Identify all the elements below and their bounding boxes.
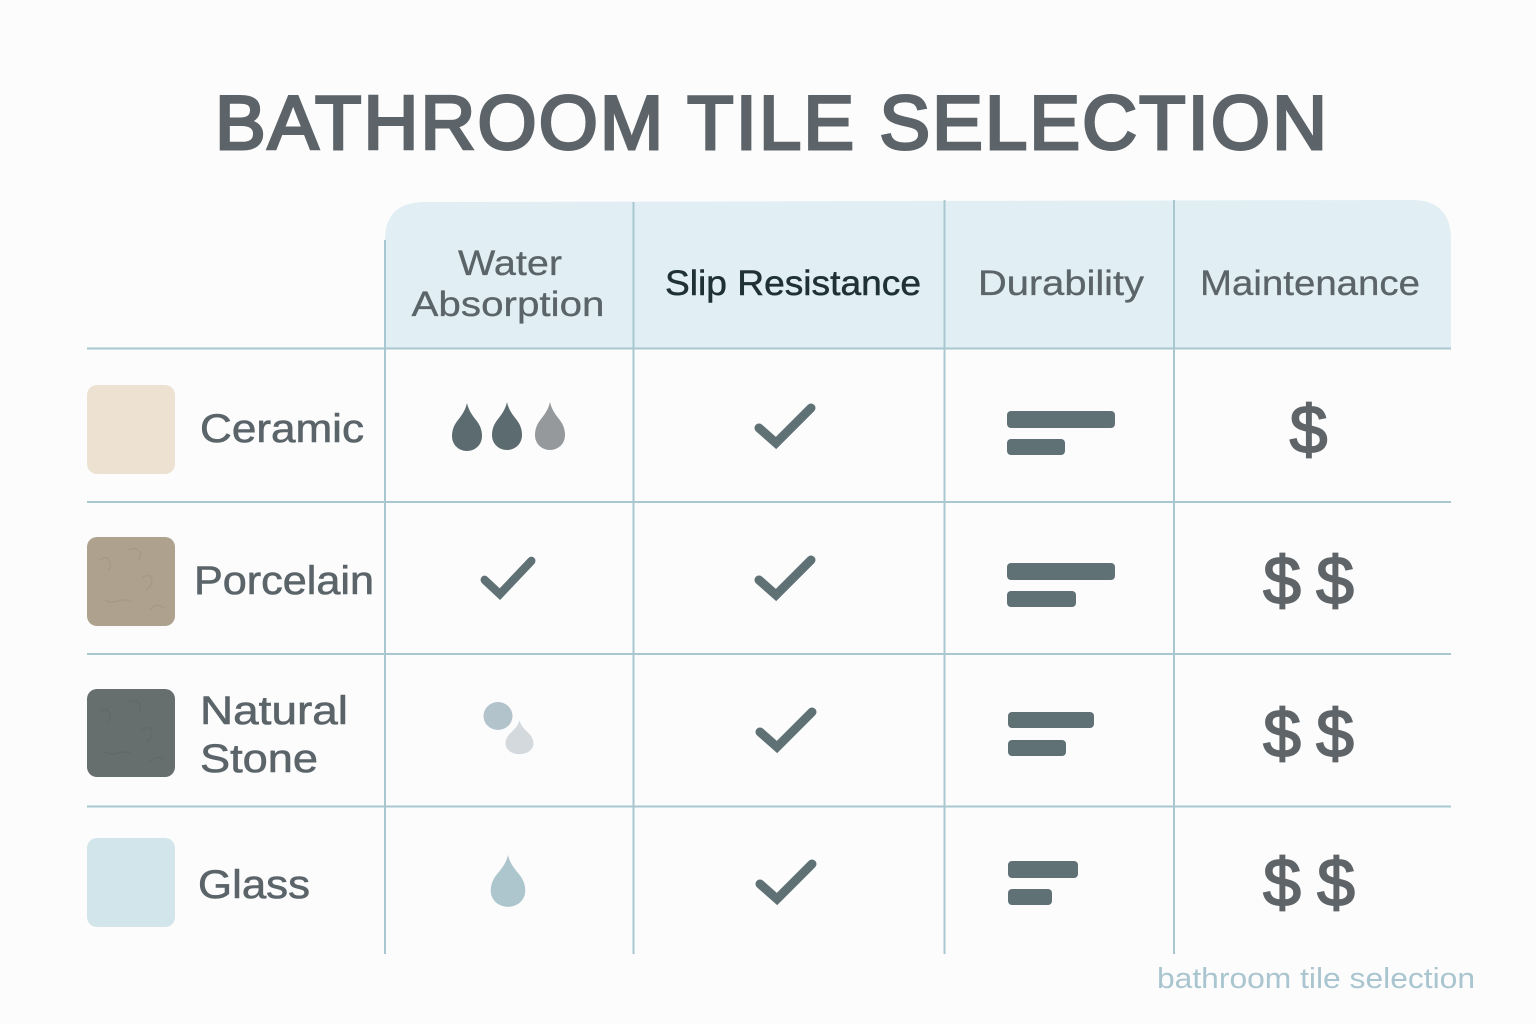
icon: water drop	[491, 855, 525, 907]
row: natural stone	[87, 689, 1354, 781]
label: natural stone	[200, 689, 348, 781]
column heading: durability: Durability	[978, 264, 1145, 303]
swatch: ceramic	[87, 385, 175, 474]
icon: dot and pale drop	[484, 702, 533, 754]
column heading: maintenance: Maintenance	[1200, 264, 1420, 303]
durability bars	[1007, 563, 1115, 607]
swatch: natural stone	[87, 689, 175, 777]
maintenance cost: $	[1263, 543, 1301, 619]
table header band	[385, 200, 1451, 348]
label: natural stone: Natural	[200, 689, 348, 733]
durability bars	[1007, 411, 1115, 455]
table grid	[87, 200, 1451, 954]
durability bars	[1008, 712, 1094, 756]
durability bars	[1008, 861, 1078, 905]
label: natural stone: Stone	[200, 737, 318, 781]
column heading: slip resistance: Slip Resistance	[665, 264, 921, 303]
swatch: glass	[87, 838, 175, 927]
maintenance cost: $	[1317, 845, 1355, 921]
maintenance cost	[1263, 845, 1355, 921]
icon: check	[485, 561, 531, 594]
title: BATHROOM TILE SELECTION	[215, 81, 1327, 166]
icon: check	[759, 560, 811, 595]
maintenance cost	[1263, 543, 1354, 619]
icon: three water drops	[452, 402, 565, 451]
label: ceramic: Ceramic	[200, 407, 364, 451]
maintenance cost: $	[1316, 543, 1354, 619]
maintenance cost: $	[1316, 696, 1354, 772]
maintenance cost: $	[1290, 392, 1327, 468]
icon: check	[760, 712, 812, 747]
row: ceramic	[87, 385, 1327, 474]
label: porcelain: Porcelain	[194, 559, 374, 603]
swatch: porcelain	[87, 537, 175, 626]
maintenance cost: $	[1263, 696, 1301, 772]
row: glass	[87, 838, 1355, 927]
column heading: water absorption: Absorption	[412, 285, 604, 324]
column heading: water absorption: Water	[458, 244, 562, 283]
icon: check	[760, 864, 812, 899]
label: glass: Glass	[198, 863, 310, 907]
column heading: water absorption	[412, 244, 604, 324]
maintenance cost: $	[1263, 845, 1301, 921]
footer caption: bathroom tile selection	[1157, 963, 1475, 995]
icon: check	[759, 408, 811, 443]
row: porcelain	[87, 537, 1354, 626]
maintenance cost	[1263, 696, 1354, 772]
